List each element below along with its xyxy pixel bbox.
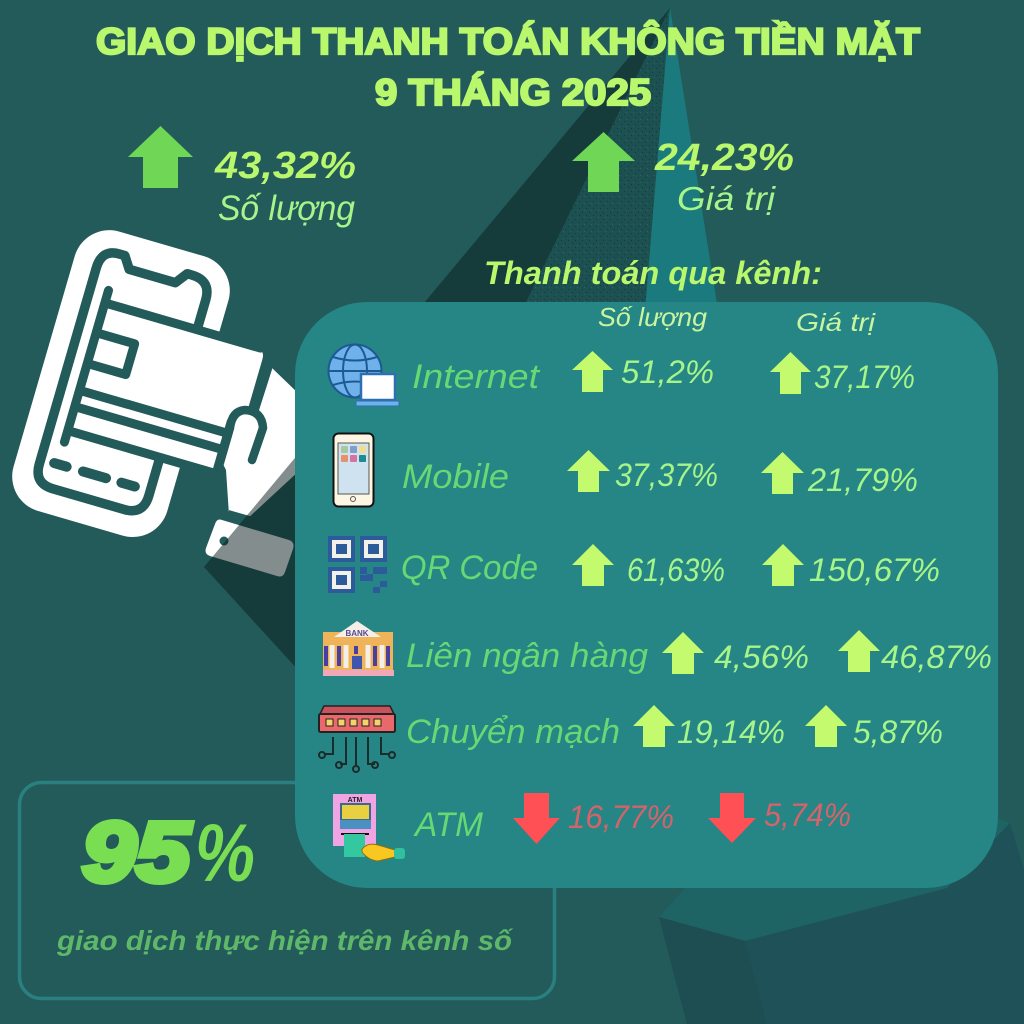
row: qr code: QR Code: [401, 549, 538, 587]
row: liên ngân hàng: 46,87%: [881, 639, 992, 675]
row: qr code: 61,63%: [627, 552, 725, 588]
background mountain: teal spike: [645, 8, 718, 310]
row: internet: Internet: [412, 358, 541, 396]
callout: 95% box: %: [195, 808, 255, 899]
row: mobile: [334, 434, 918, 506]
icon: bank: BANK: [345, 629, 369, 638]
icon: atm machine: [333, 794, 405, 861]
title: [96, 20, 920, 113]
stat: giá trị: 24,23%: [654, 137, 794, 179]
icon: bank: [323, 621, 394, 676]
stat: số lượng: Số lượng: [218, 189, 356, 228]
heading: thanh toán qua kênh: Thanh toán qua kênh:: [484, 255, 822, 291]
row: mobile: Mobile: [402, 458, 509, 496]
column header: giá trị: Giá trị: [796, 309, 877, 337]
row: atm: [333, 793, 851, 861]
icon: smartphone: [334, 434, 374, 506]
callout: 95% box: giao dịch thực hiện trên kênh số: [56, 925, 514, 956]
row: chuyển mạch: 5,87%: [853, 714, 943, 750]
row: liên ngân hàng: Liên ngân hàng: [406, 637, 648, 675]
row: qr code: 150,67%: [809, 552, 940, 588]
row: atm: 16,77%: [568, 799, 674, 835]
background mountain: speckled face: [526, 8, 670, 302]
hand: [222, 368, 300, 520]
background rock: lighter facet: [659, 780, 1010, 941]
row: liên ngân hàng: 4,56%: [714, 639, 809, 675]
stat: giá trị: [572, 132, 794, 217]
row: liên ngân hàng: [323, 621, 992, 676]
icon: up arrow: [128, 126, 193, 188]
stat: số lượng: [128, 126, 356, 228]
row: internet: 51,2%: [621, 354, 714, 390]
row: atm: ATM: [413, 806, 484, 844]
icon: qr code: [328, 536, 387, 593]
background mountain: long dark shadow: [204, 8, 670, 672]
icon: up arrow: [572, 132, 635, 192]
row: mobile: 21,79%: [807, 462, 918, 498]
row: internet: 37,17%: [814, 359, 915, 395]
panel: channels: [295, 302, 998, 888]
background rock: left dark facet: [659, 917, 767, 1024]
phone body: [4, 222, 285, 559]
row: chuyển mạch: [319, 705, 943, 772]
icon: atm machine: ATM: [348, 797, 362, 804]
stat: số lượng: 43,32%: [214, 145, 356, 187]
title: 9 THÁNG 2025: [375, 72, 651, 113]
callout: 95% box: 95: [82, 805, 191, 899]
stat: giá trị: Giá trị: [677, 180, 777, 217]
column header: số lượng: Số lượng: [598, 302, 708, 332]
row: mobile: 37,37%: [615, 457, 718, 493]
row: internet: [328, 344, 915, 406]
title: GIAO DỊCH THANH TOÁN KHÔNG TIỀN MẶT: [96, 20, 920, 62]
icon: globe and laptop: [328, 344, 399, 406]
row: chuyển mạch: 19,14%: [677, 714, 785, 750]
background rock: dark facet: [659, 823, 1024, 1024]
icon: phone with card and hand: [4, 222, 300, 576]
row: atm: 5,74%: [764, 797, 851, 833]
cuff: [206, 520, 294, 576]
row: qr code: [328, 536, 940, 593]
row: chuyển mạch: Chuyển mạch: [406, 713, 620, 751]
callout: 95% box: [20, 782, 554, 998]
icon: network switch: [319, 706, 395, 772]
